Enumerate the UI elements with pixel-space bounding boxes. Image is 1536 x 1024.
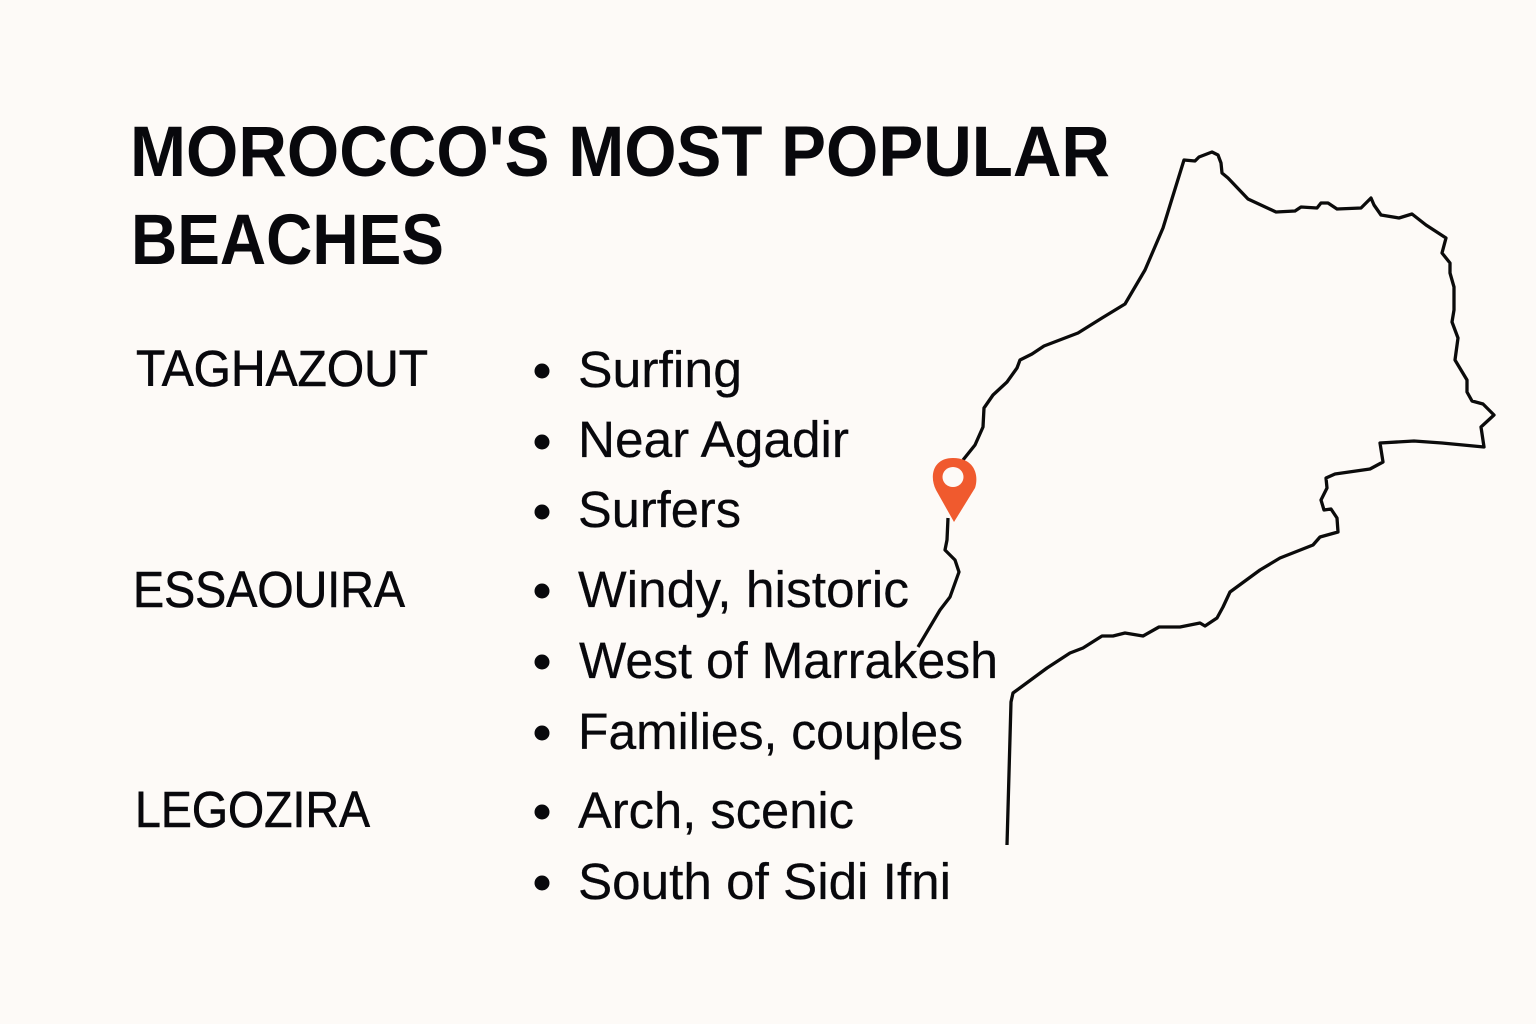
list: Essaouira details: Windy, historic <box>578 561 909 618</box>
label: Essaouira: ESSAOUIRA <box>133 561 405 618</box>
list: Taghazout details: Surfers <box>578 481 741 538</box>
beach: Taghazout <box>136 340 849 538</box>
list: Essaouira details <box>534 561 998 760</box>
list: Essaouira details: Families, couples <box>578 703 963 760</box>
map: outline of Morocco <box>918 152 1494 845</box>
title: BEACHES <box>131 201 444 280</box>
list: Taghazout details <box>534 341 849 538</box>
list: Essaouira details: West of Marrakesh <box>579 632 998 689</box>
list: Legzira details <box>534 782 951 910</box>
beach: Essaouira <box>133 561 998 760</box>
title <box>130 113 1110 280</box>
list: Legzira details: Arch, scenic <box>578 782 854 839</box>
list: Taghazout details: Surfing <box>578 341 742 398</box>
label: Legozira: LEGOZIRA <box>135 781 370 838</box>
beach: Legzira <box>135 781 951 910</box>
title: MOROCCO'S MOST POPULAR <box>130 113 1110 192</box>
list: Taghazout details: Near Agadir <box>578 411 849 468</box>
list: Legzira details: South of Sidi Ifni <box>578 853 951 910</box>
label: Taghazout: TAGHAZOUT <box>136 340 428 397</box>
icon: location pin <box>933 458 976 522</box>
